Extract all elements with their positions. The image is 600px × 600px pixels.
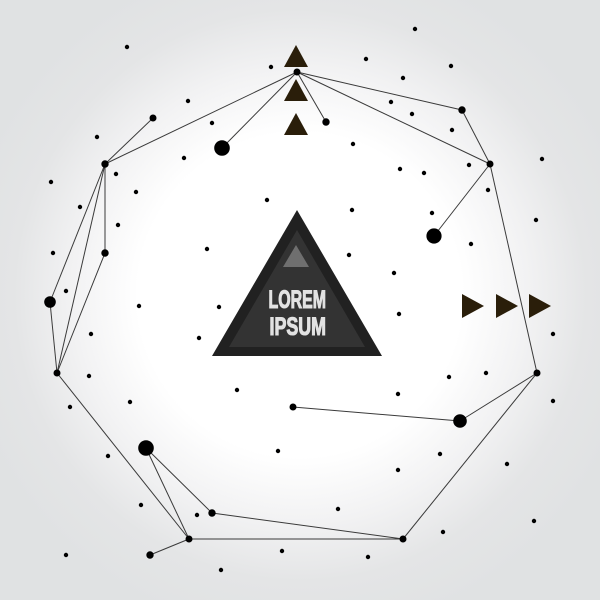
- network connecting lines: [50, 72, 537, 555]
- badge outer triangle: [212, 210, 382, 356]
- badge title text: IPSUM: [270, 313, 326, 341]
- badge small grey triangle: [283, 245, 309, 267]
- badge title text: LOREM: [268, 286, 326, 314]
- badge inner triangle: [229, 230, 365, 347]
- scattered background dots: [49, 27, 555, 572]
- network nodes: [44, 68, 540, 559]
- badge title text: [268, 286, 326, 341]
- arrows: upward triangles: [284, 45, 308, 135]
- arrows: rightward triangles: [462, 294, 551, 318]
- central triangle badge: [212, 210, 382, 356]
